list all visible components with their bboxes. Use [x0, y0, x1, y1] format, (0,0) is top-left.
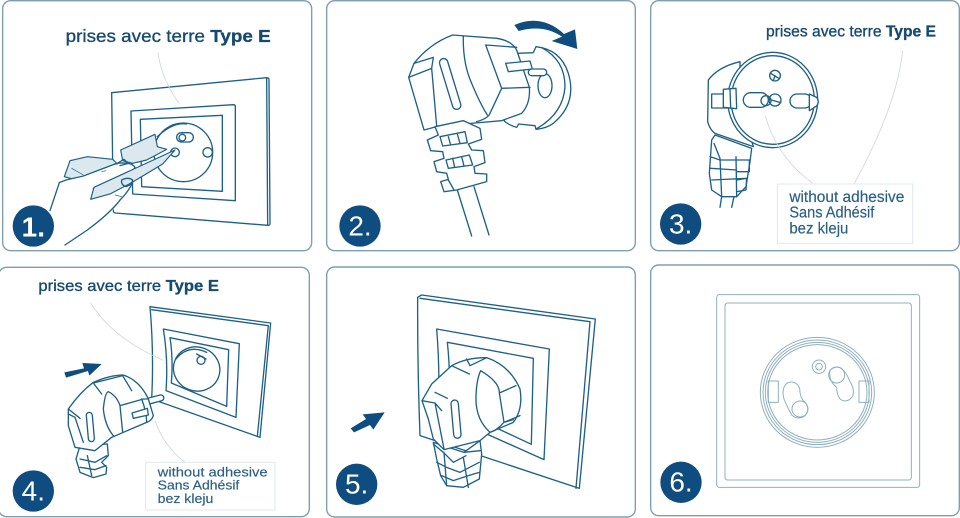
leader lines	[765, 51, 903, 185]
wall socket	[112, 78, 270, 225]
leader line	[158, 53, 179, 103]
panel: step 4	[0, 267, 309, 517]
leader lines	[91, 303, 185, 462]
panel: step 5	[327, 267, 635, 517]
step number 6	[660, 462, 702, 503]
callout: without adhesive	[777, 184, 913, 243]
step number 6: 6.	[669, 467, 693, 498]
callout: without adhesive: without adhesive	[157, 464, 268, 479]
arrow: rotate clockwise	[514, 21, 577, 49]
callout: without adhesive: bez kleju	[789, 220, 848, 237]
step number 3: 3.	[669, 208, 692, 239]
step number 1	[13, 205, 54, 247]
step number 2: 2.	[348, 210, 372, 241]
callout: without adhesive: without adhesive	[788, 189, 904, 206]
step number 5: 5.	[345, 469, 368, 500]
plug	[68, 375, 164, 478]
wall socket	[418, 295, 595, 488]
arrow: push in	[351, 412, 385, 432]
step number 3	[660, 203, 701, 245]
wall socket	[150, 307, 271, 437]
plug inserted	[422, 358, 521, 487]
panel: step 1	[3, 1, 312, 251]
panel: step 2	[327, 1, 635, 251]
title: socket type: prises avec terre Type E	[66, 26, 271, 46]
step number 5	[336, 464, 377, 505]
step number 1: 1.	[22, 212, 45, 243]
plug rear view	[708, 52, 818, 207]
panel: step 6	[651, 265, 959, 516]
step number 4	[13, 470, 54, 512]
callout: without adhesive: Sans Adhésif	[158, 478, 240, 493]
title: socket type: prises avec terre Type E	[766, 24, 936, 41]
step number 4: 4.	[22, 475, 45, 506]
panel: step 3	[651, 1, 959, 251]
callout: without adhesive: Sans Adhésif	[789, 205, 875, 222]
arrow: push toward socket	[64, 363, 102, 378]
callout: without adhesive	[146, 462, 275, 510]
callout: without adhesive: bez kleju	[158, 491, 213, 506]
plug with cord	[409, 35, 571, 236]
title: socket type: prises avec terre Type E	[38, 278, 219, 295]
step number 2	[339, 205, 381, 247]
hand holding wipe	[20, 134, 175, 245]
wall plate with fitted adapter	[717, 295, 920, 487]
